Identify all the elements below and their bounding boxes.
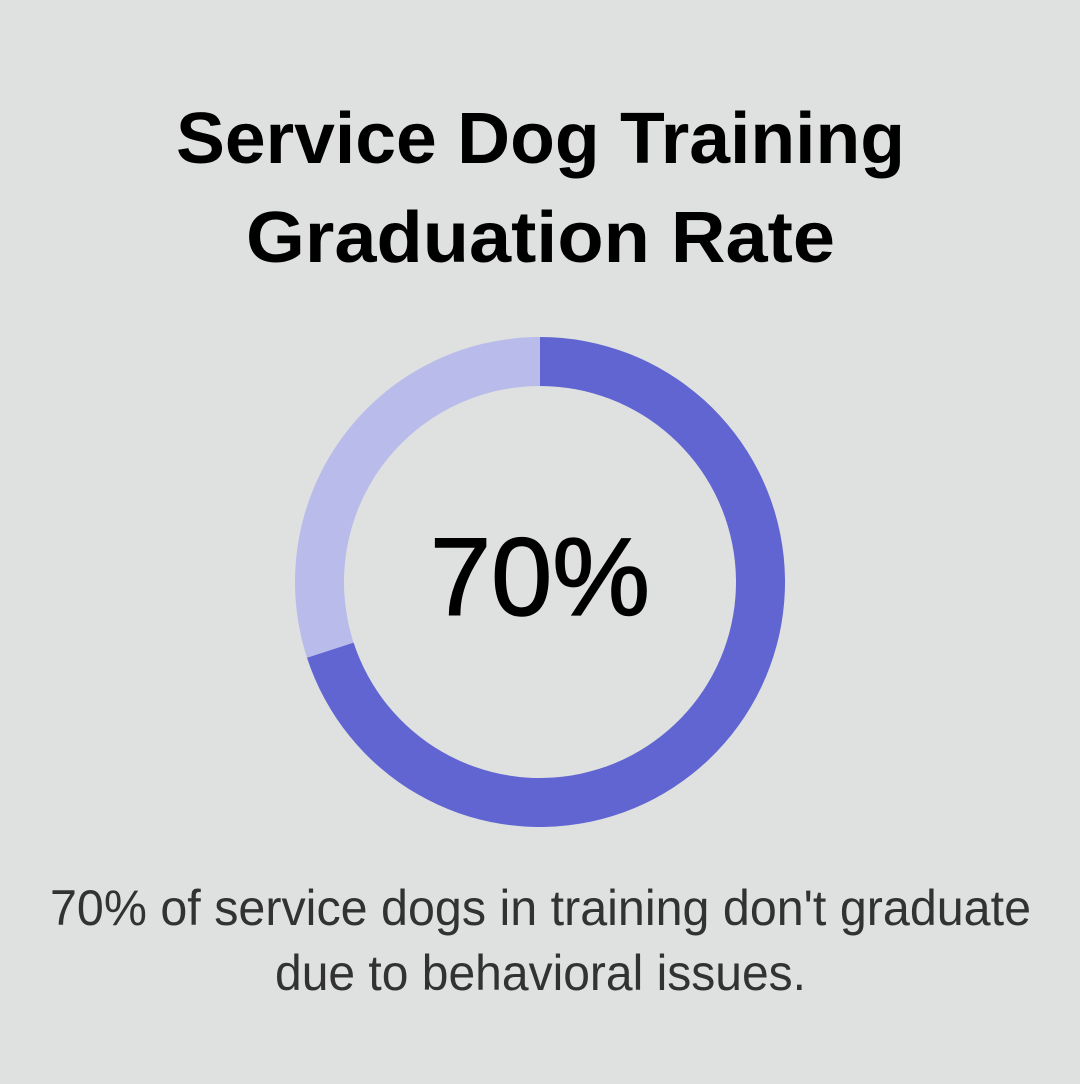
caption	[50, 880, 1031, 1001]
caption: 70% of service dogs in training don't graduate	[50, 880, 1031, 936]
donut chart: 70 percent	[295, 337, 785, 827]
title: Graduation Rate	[246, 198, 835, 278]
donut 70 percent segment	[307, 337, 785, 827]
title: Service Dog Training	[176, 99, 905, 179]
caption: due to behavioral issues.	[275, 945, 806, 1001]
title	[176, 99, 905, 278]
center value: 70%	[430, 516, 650, 639]
donut remainder segment	[295, 337, 540, 658]
